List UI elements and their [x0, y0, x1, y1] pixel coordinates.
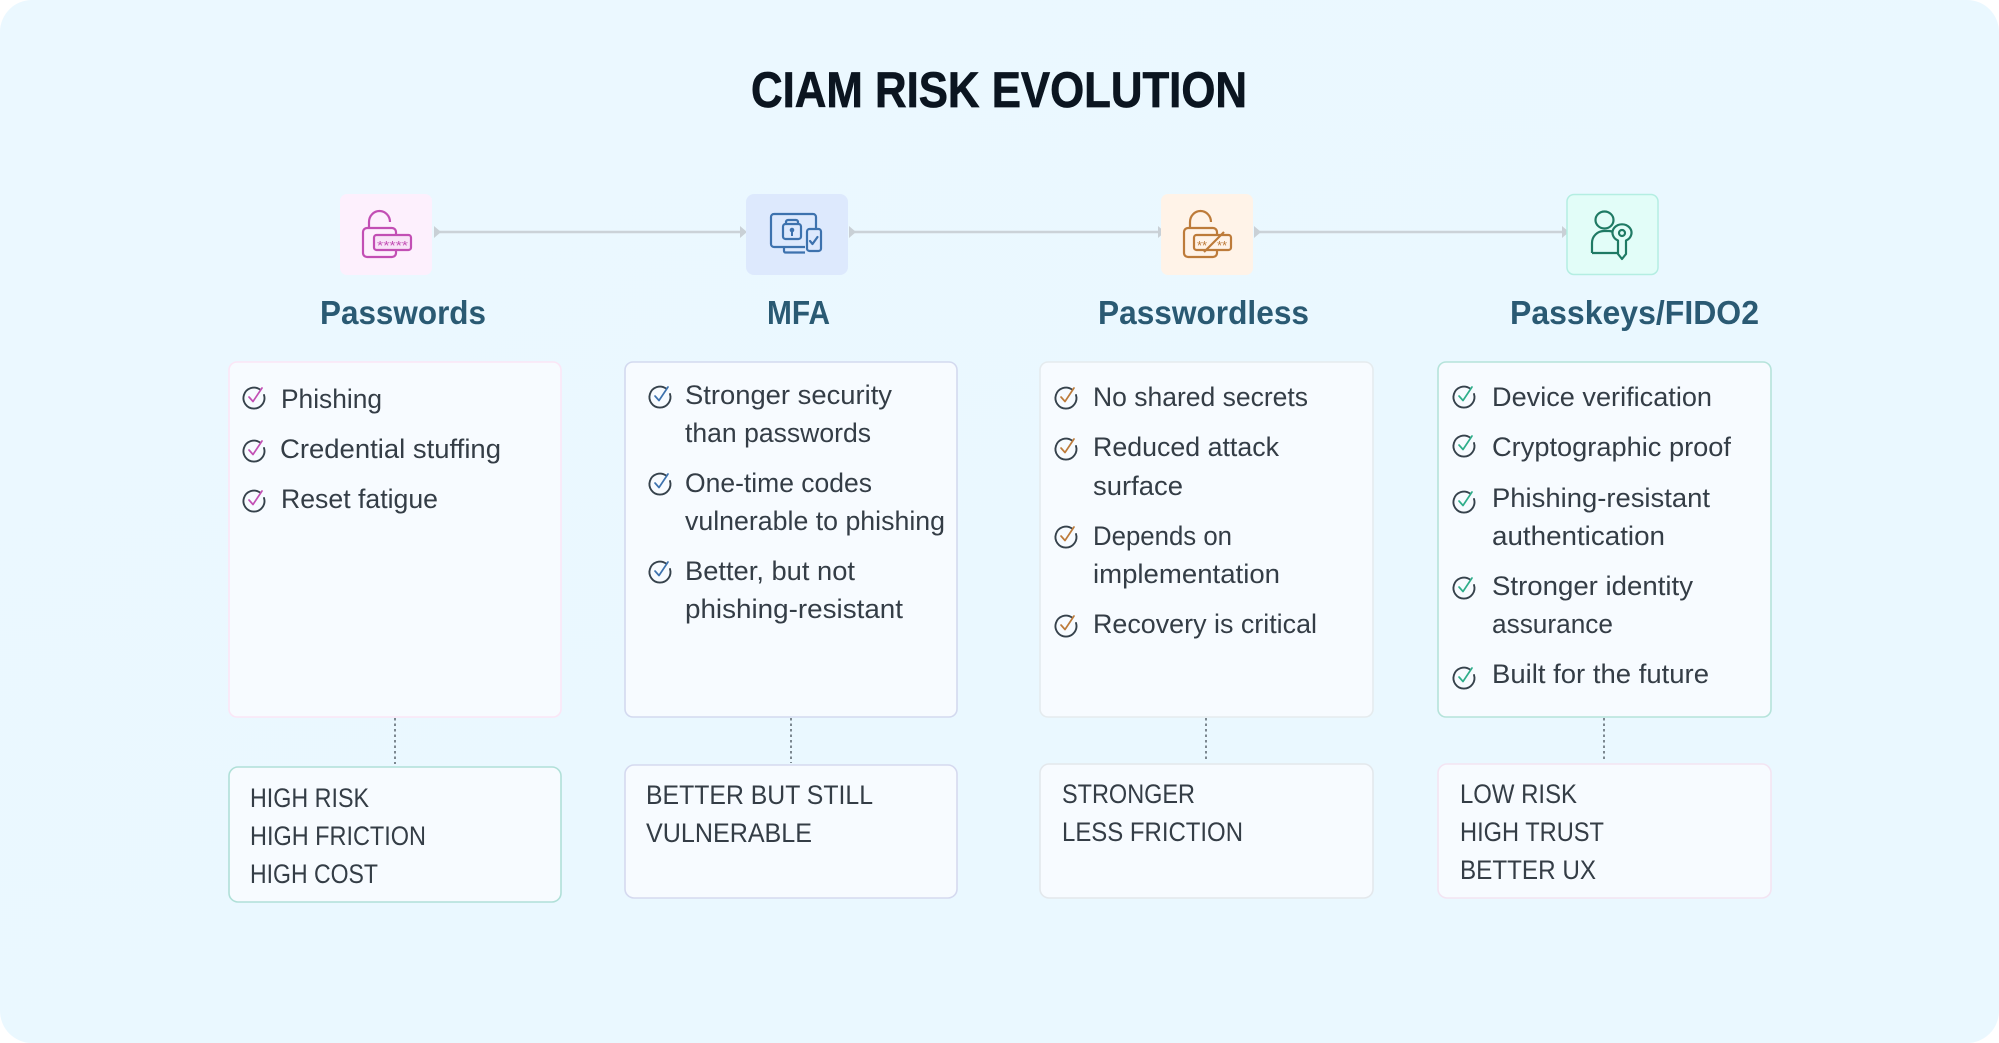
item: Reset fatigue: Reset fatigue: [281, 484, 438, 514]
item: Better, but not phishing-resistant: phishing-resistant: [685, 594, 904, 624]
check icon: Reduced attack surface: [1055, 439, 1076, 460]
item: Better, but not phishing-resistant: Better, but not: [685, 556, 856, 586]
connector: passwordless: [1205, 718, 1207, 762]
outcome box: MFA: VULNERABLE: [646, 818, 812, 848]
item: Reduced attack surface: [1093, 432, 1280, 501]
check icon: Built for the future: [1453, 668, 1474, 689]
check icon: Credential stuffing: [243, 441, 264, 462]
panel: passwordless risks: [1040, 362, 1373, 717]
item: One-time codes vulnerable to phishing: One-time codes: [685, 468, 872, 498]
item: Phishing-resistant authentication: Phishing-resistant: [1492, 483, 1711, 513]
check icon: Phishing: [243, 388, 264, 409]
connector: MFA: [790, 718, 792, 763]
item: Phishing-resistant authentication: authentication: [1492, 521, 1665, 551]
outcome box: passwords: HIGH FRICTION: [250, 821, 426, 851]
item: Depends on implementation: [1093, 521, 1280, 589]
icon: passwordless padlock: [1161, 194, 1253, 275]
check icon: Phishing-resistant authentication: [1453, 492, 1474, 513]
item: One-time codes vulnerable to phishing: [685, 468, 945, 536]
check icon: Depends on implementation: [1055, 527, 1076, 548]
item: Stronger security than passwords: than passwords: [685, 418, 871, 448]
heading: Passwordless: Passwordless: [1098, 294, 1309, 331]
icon: passwordless padlock: **: [1197, 238, 1207, 253]
icon: passwords padlock: *****: [377, 238, 408, 253]
panel: passwords risks: [229, 362, 561, 717]
check icon: Cryptographic proof: [1453, 436, 1474, 457]
outcome box: passkeys: BETTER UX: [1460, 855, 1596, 885]
icon: passwordless padlock: **: [1217, 238, 1227, 253]
item: Credential stuffing: Credential stuffing: [280, 434, 501, 464]
icon: MFA devices: [746, 194, 848, 275]
check icon: One-time codes: [649, 474, 670, 495]
item: Reduced attack surface: surface: [1093, 471, 1183, 501]
check icon: Stronger identity assurance: [1453, 578, 1474, 599]
outcome box: passwords: [229, 767, 561, 902]
panel: passkeys benefits: [1438, 362, 1771, 717]
check icon: No shared secrets: [1055, 388, 1076, 409]
item: Reduced attack surface: Reduced attack: [1093, 432, 1280, 462]
icon: passwords padlock: [340, 194, 432, 275]
arrow: passwordless to passkeys: [1254, 226, 1569, 238]
check icon: Stronger security: [649, 387, 670, 408]
check icon: Device verification: [1453, 387, 1474, 408]
item: Stronger security than passwords: [685, 380, 893, 448]
heading: MFA: MFA: [767, 294, 830, 331]
item: Stronger security than passwords: Stronger security: [685, 380, 893, 410]
outcome box: passkeys: LOW RISK: [1460, 779, 1577, 809]
heading: Passwords: Passwords: [320, 294, 486, 331]
item: Stronger identity assurance: Stronger identity: [1492, 571, 1694, 601]
outcome box: passwords: HIGH COST: [250, 859, 378, 889]
item: Stronger identity assurance: [1492, 571, 1694, 639]
outcome box: passwordless: [1040, 764, 1373, 898]
check icon: Recovery is critical: [1055, 616, 1076, 637]
item: Phishing-resistant authentication: [1492, 483, 1711, 551]
outcome box: passkeys: HIGH TRUST: [1460, 817, 1604, 847]
outcome box: passwordless: LESS FRICTION: [1062, 817, 1243, 847]
outcome box: passwordless: STRONGER: [1062, 779, 1195, 809]
item: Depends on implementation: Depends on: [1093, 521, 1232, 551]
arrow: MFA to passwordless: [849, 226, 1165, 238]
item: Phishing: Phishing: [281, 384, 382, 414]
item: No shared secrets: No shared secrets: [1093, 382, 1308, 412]
outcome box: passkeys: [1438, 764, 1771, 898]
item: Stronger identity assurance: assurance: [1492, 609, 1613, 639]
item: Cryptographic proof: Cryptographic proof: [1492, 432, 1732, 462]
outcome box: MFA: [625, 765, 957, 898]
item: One-time codes vulnerable to phishing: vulnerable to phishing: [685, 506, 945, 536]
connector: passwords: [394, 718, 396, 764]
check icon: Reset fatigue: [243, 491, 264, 512]
outcome box: passwords: HIGH RISK: [250, 783, 369, 813]
item: Built for the future: Built for the future: [1492, 659, 1709, 689]
connector: passkeys: [1603, 718, 1605, 762]
item: Device verification: Device verification: [1492, 382, 1712, 412]
item: Better, but not phishing-resistant: [685, 556, 904, 624]
item: Depends on implementation: implementation: [1093, 559, 1280, 589]
heading: Passkeys/FIDO2: Passkeys/FIDO2: [1510, 294, 1759, 331]
panel: MFA risks: [625, 362, 957, 717]
item: Recovery is critical: Recovery is critical: [1093, 609, 1317, 639]
outcome box: MFA: BETTER BUT STILL: [646, 780, 873, 810]
check icon: Better, but not: [649, 562, 670, 583]
title: CIAM RISK EVOLUTION: [751, 62, 1247, 118]
icon: passkeys user and key: [1567, 194, 1658, 274]
arrow: passwords to MFA: [434, 226, 747, 238]
